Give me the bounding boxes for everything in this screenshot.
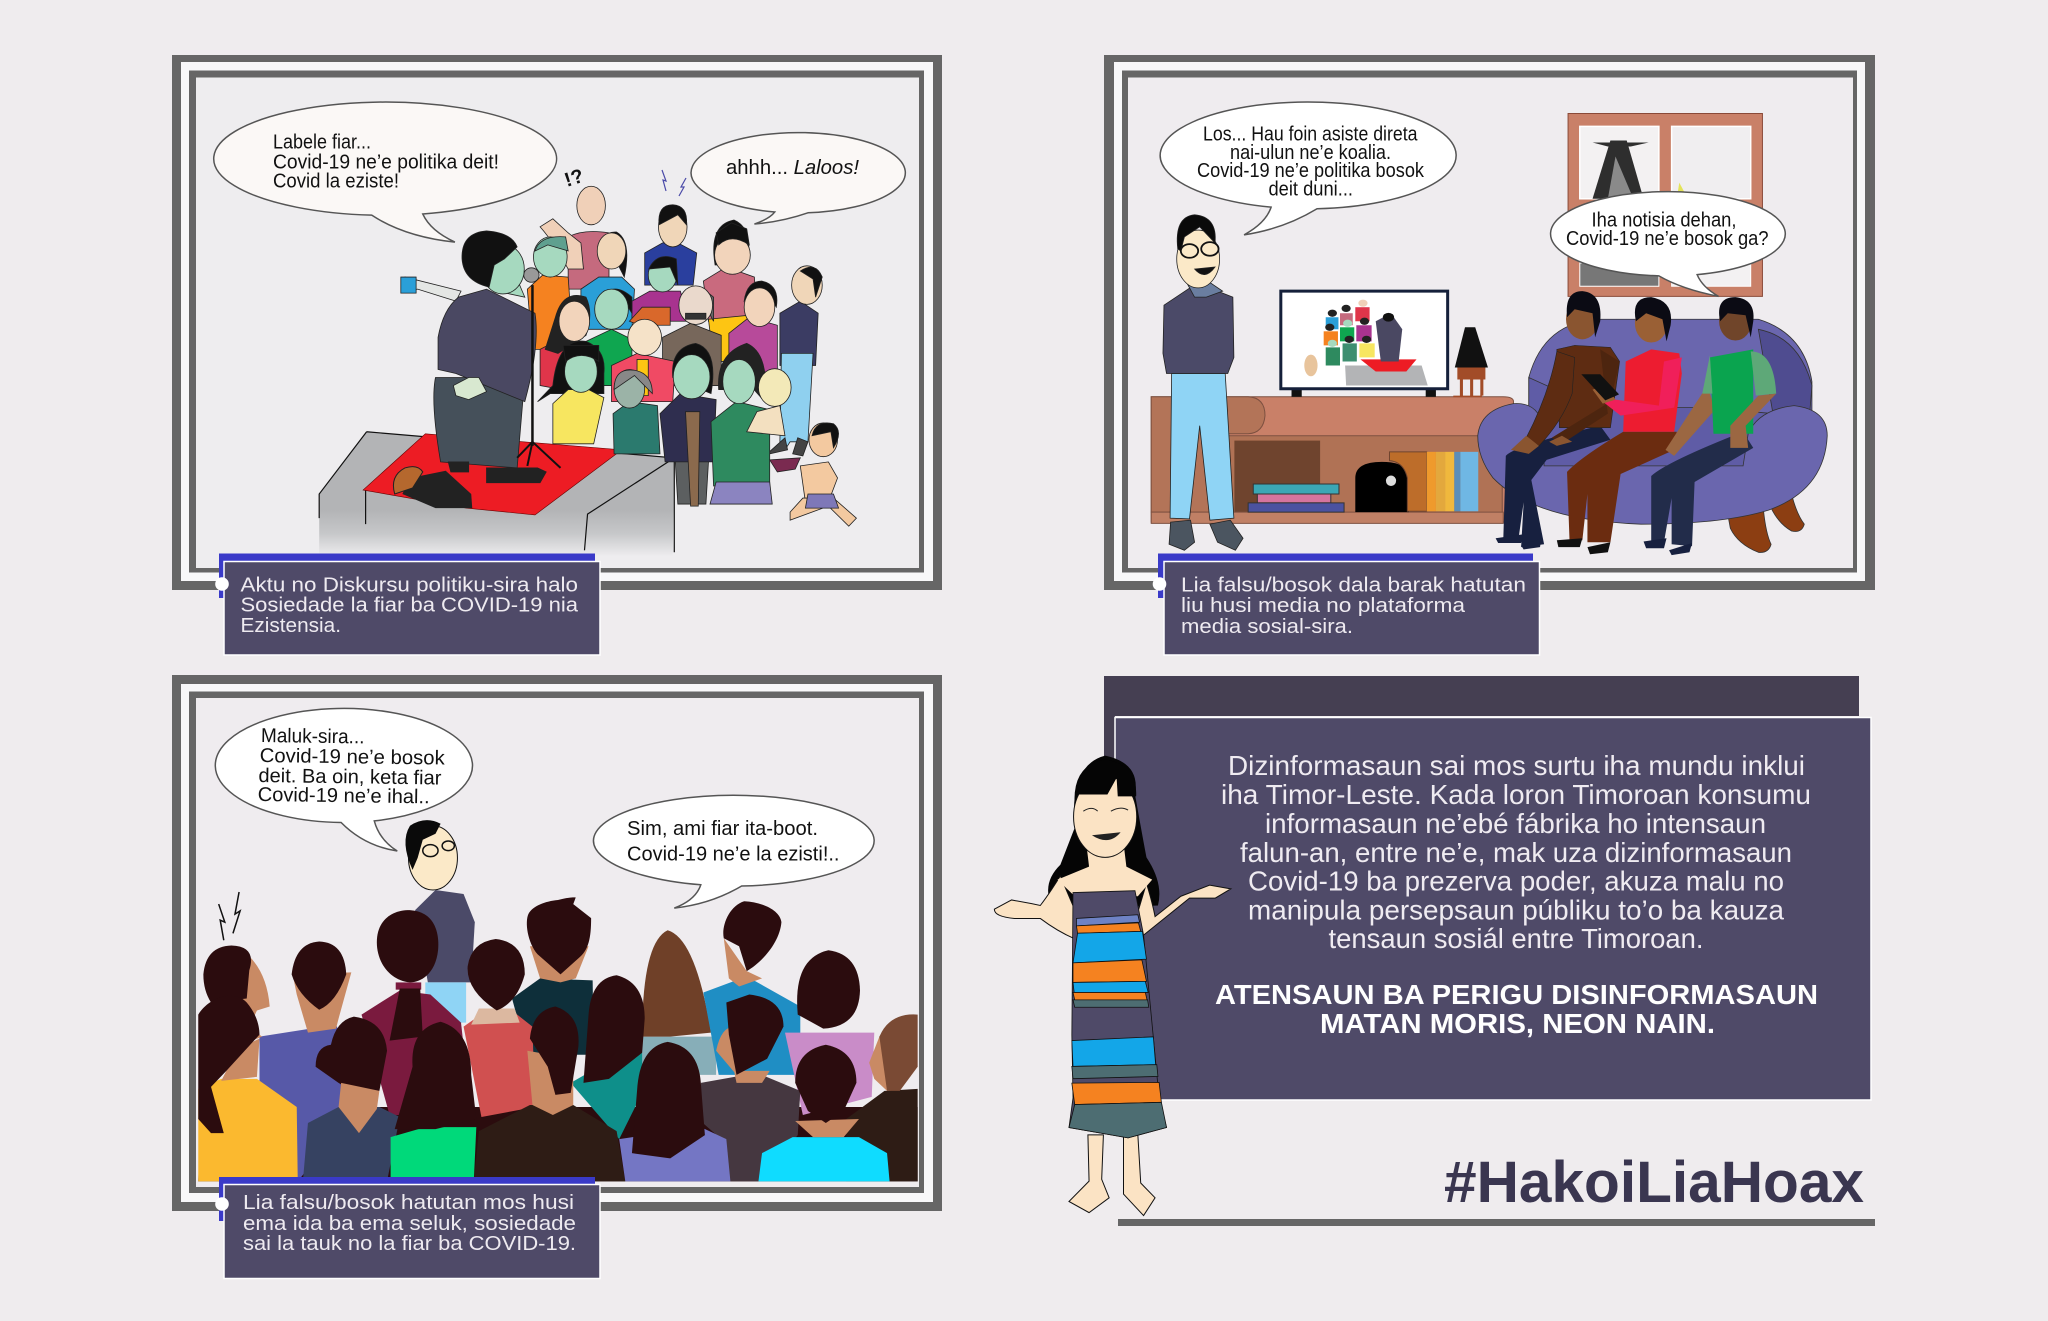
caption 2: Lia falsu/bosok dala barak hatutan [1181, 574, 1526, 596]
speech bubble: man with glasses: Los... Hau foin asiste direta [1203, 124, 1418, 146]
speech bubble: man with glasses: Covid-19 ne’e ihal.. [257, 784, 430, 808]
body text: iha Timor-Leste. Kada loron Timoroan konsumu [1221, 779, 1811, 810]
caption 1 [215, 554, 600, 655]
purple sofa [1478, 319, 1827, 552]
body text: manipula persepsaun públiku to’o ba kauza [1248, 894, 1784, 926]
panel: disinformation message [994, 676, 1875, 1226]
speech bubble: politician: Covid-19 ne’e politika deit! [273, 152, 499, 174]
lightning marks [219, 892, 240, 940]
caption 1: Sosiedade la fiar ba COVID-19 nia [240, 594, 579, 616]
panel frame [172, 675, 942, 1211]
right arm [1132, 883, 1231, 935]
message box [1115, 718, 1871, 1100]
head and shoulders [1057, 843, 1152, 896]
icon: confusion marks: !? [562, 165, 587, 192]
caption 3 [215, 1177, 600, 1278]
icon: lightning marks [662, 170, 686, 196]
three men on sofa [1496, 291, 1776, 555]
politician at microphone [401, 231, 561, 483]
hashtag underline [1118, 1219, 1875, 1226]
caption 2: media sosial-sira. [1181, 616, 1353, 638]
body text: falun-an, entre ne’e, mak uza dizinformasaun [1240, 837, 1792, 868]
speech bubble: man with glasses [215, 708, 472, 851]
bold call to action: MATAN MORIS, NEON NAIN. [1320, 1008, 1715, 1039]
speech bubble: politician [214, 102, 557, 242]
standing man with glasses [1163, 215, 1243, 550]
caption 2 [1153, 554, 1540, 655]
speech bubble: audience [594, 795, 874, 908]
panel frame [172, 55, 942, 590]
speech bubble: man with glasses: Maluk-sira... [261, 725, 365, 748]
speech bubble: audience: Sim, ami fiar ita-boot. [627, 818, 818, 840]
speech bubble: politician: Covid la eziste! [273, 170, 399, 192]
illustration: woman in striped tais dress [994, 756, 1231, 1216]
caption 1: Ezistensia. [240, 615, 341, 637]
bold call to action: ATENSAUN BA PERIGU DISINFORMASAUN [1215, 979, 1818, 1010]
caption 3: ema ida ba ema seluk, sosiedade [243, 1213, 576, 1235]
panel: politicians deny COVID-19 [172, 55, 942, 655]
speech bubble: man with glasses: Covid-19 ne’e politika bosok [1197, 160, 1425, 182]
panel: media spreads disinformation [1104, 55, 1875, 655]
body text: Covid-19 ba prezerva poder, akuza malu no [1248, 866, 1784, 896]
audience shirts and heads [198, 897, 918, 1181]
hashtag: #HakoiLiaHoax [1444, 1150, 1864, 1215]
speech bubble: politician: Labele fiar... [273, 132, 371, 154]
speech bubble: crowd agrees [691, 133, 905, 224]
panel frame [1104, 55, 1875, 590]
legs and feet [1069, 1135, 1155, 1216]
caption 3: Lia falsu/bosok hatutan mos husi [243, 1192, 574, 1214]
illustration: living room [1151, 114, 1827, 555]
dark header backing [1104, 676, 1859, 790]
wall window [1568, 114, 1762, 296]
stage [319, 432, 674, 556]
television [1281, 291, 1448, 397]
illustration: man speaking to a group from behind [198, 820, 918, 1181]
speech bubble: man with glasses: nai-ulun ne’e koalia. [1230, 142, 1391, 164]
speech bubble: man with glasses [1160, 102, 1456, 235]
body text: tensaun sosiál entre Timoroan. [1328, 923, 1704, 954]
standing man [405, 820, 475, 1023]
speech bubble: man with glasses: deit duni... [1268, 178, 1353, 200]
panel: lies spread between people [172, 675, 942, 1278]
dress with stripes [1069, 891, 1167, 1138]
body text: informasaun ne’ebé fábrika ho intensaun [1265, 808, 1766, 839]
caption 2: liu husi media no plataforma [1181, 595, 1466, 617]
body text: Dizinformasaun sai mos surtu iha mundu inklui [1228, 750, 1805, 781]
arms [994, 876, 1078, 939]
hair [1048, 756, 1159, 917]
speech bubble: men on sofa [1551, 192, 1785, 296]
speech bubble: men on sofa: Covid-19 ne’e bosok ga? [1566, 228, 1768, 250]
speech bubble: man with glasses: Covid-19 ne’e bosok [260, 745, 446, 770]
bold call to action [1215, 979, 1818, 1039]
speech bubble: crowd agrees: ahhh... Laloos! [726, 157, 859, 179]
caption 1: Aktu no Diskursu politiku-sira halo [240, 574, 578, 596]
crowd members [527, 186, 856, 526]
speech bubble: men on sofa: Iha notisia dehan, [1592, 210, 1736, 232]
body text [1221, 750, 1811, 954]
TV cabinet [1151, 397, 1513, 523]
speech bubble: audience: Covid-19 ne’e la ezisti!.. [627, 844, 840, 866]
caption 3: sai la tauk no la fiar ba COVID-19. [243, 1233, 576, 1255]
illustration: politician on stage addressing the crowd [319, 186, 856, 556]
speech bubble: man with glasses: deit. Ba oin, keta fiar [258, 765, 442, 790]
traditional house model [1453, 327, 1488, 397]
